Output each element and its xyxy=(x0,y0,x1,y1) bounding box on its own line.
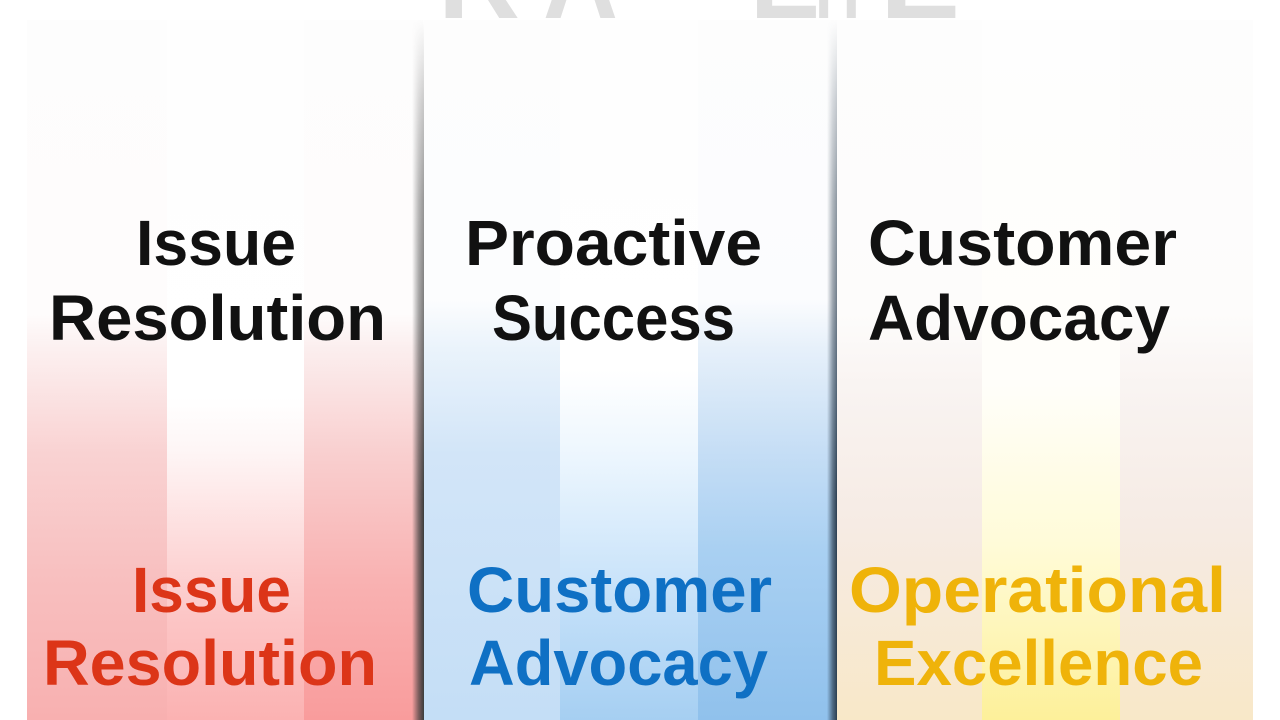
panel: customer advocacy xyxy=(837,20,1253,720)
label: customer advocacy: Customer xyxy=(467,554,772,626)
heading: customer advocacy: Customer xyxy=(868,207,1177,279)
panel: proactive success xyxy=(424,20,837,720)
label: issue resolution xyxy=(43,554,377,699)
label: customer advocacy xyxy=(467,554,772,699)
heading: issue resolution xyxy=(49,207,386,354)
heading: issue resolution: Resolution xyxy=(49,282,386,354)
label: operational excellence: Operational xyxy=(849,554,1226,626)
panel: issue resolution xyxy=(27,20,424,720)
label: issue resolution: Resolution xyxy=(43,627,377,699)
heading: proactive success: Success xyxy=(492,282,735,354)
heading: customer advocacy: Advocacy xyxy=(868,282,1170,354)
heading: issue resolution: Issue xyxy=(136,207,296,279)
heading: customer advocacy xyxy=(868,207,1177,354)
label: issue resolution: Issue xyxy=(132,554,291,626)
heading: proactive success: Proactive xyxy=(465,207,762,279)
label: operational excellence: Excellence xyxy=(874,627,1203,699)
heading: proactive success xyxy=(465,207,762,354)
label: operational excellence xyxy=(849,554,1226,699)
label: customer advocacy: Advocacy xyxy=(469,627,768,699)
faded header text remnant xyxy=(438,0,960,42)
